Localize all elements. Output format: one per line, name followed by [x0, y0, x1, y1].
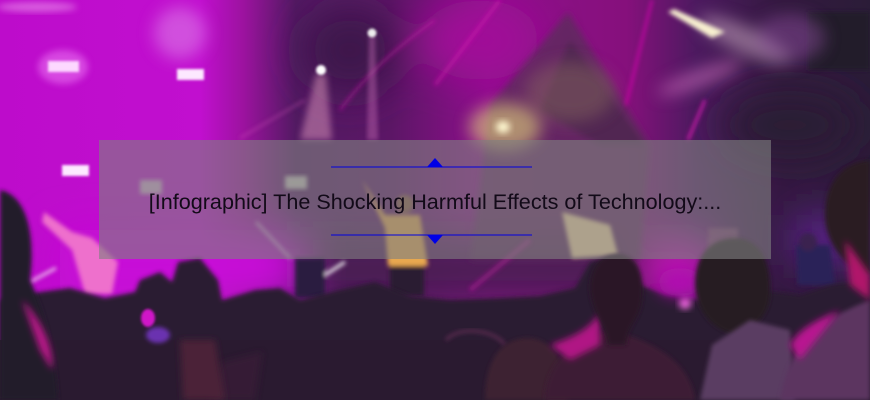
performers: [30, 180, 835, 298]
foreground audience: [0, 160, 870, 400]
smoke: [154, 7, 825, 122]
stage glow and dark areas: [60, 0, 870, 300]
bottom divider with diamond: [331, 234, 532, 244]
top divider with diamond: [331, 158, 532, 168]
crowd mass: [0, 255, 870, 400]
laser beams: [240, 0, 705, 290]
heading: [Infographic] The Shocking Harmful Effects of Technology:...: [149, 189, 721, 214]
dark triangle wedge: [470, 12, 650, 260]
crowd highlights: [141, 268, 702, 400]
stage light bars: [38, 50, 307, 194]
spotlights: [0, 2, 725, 151]
top-right dark panel: [808, 12, 870, 70]
title panel: [99, 140, 771, 259]
